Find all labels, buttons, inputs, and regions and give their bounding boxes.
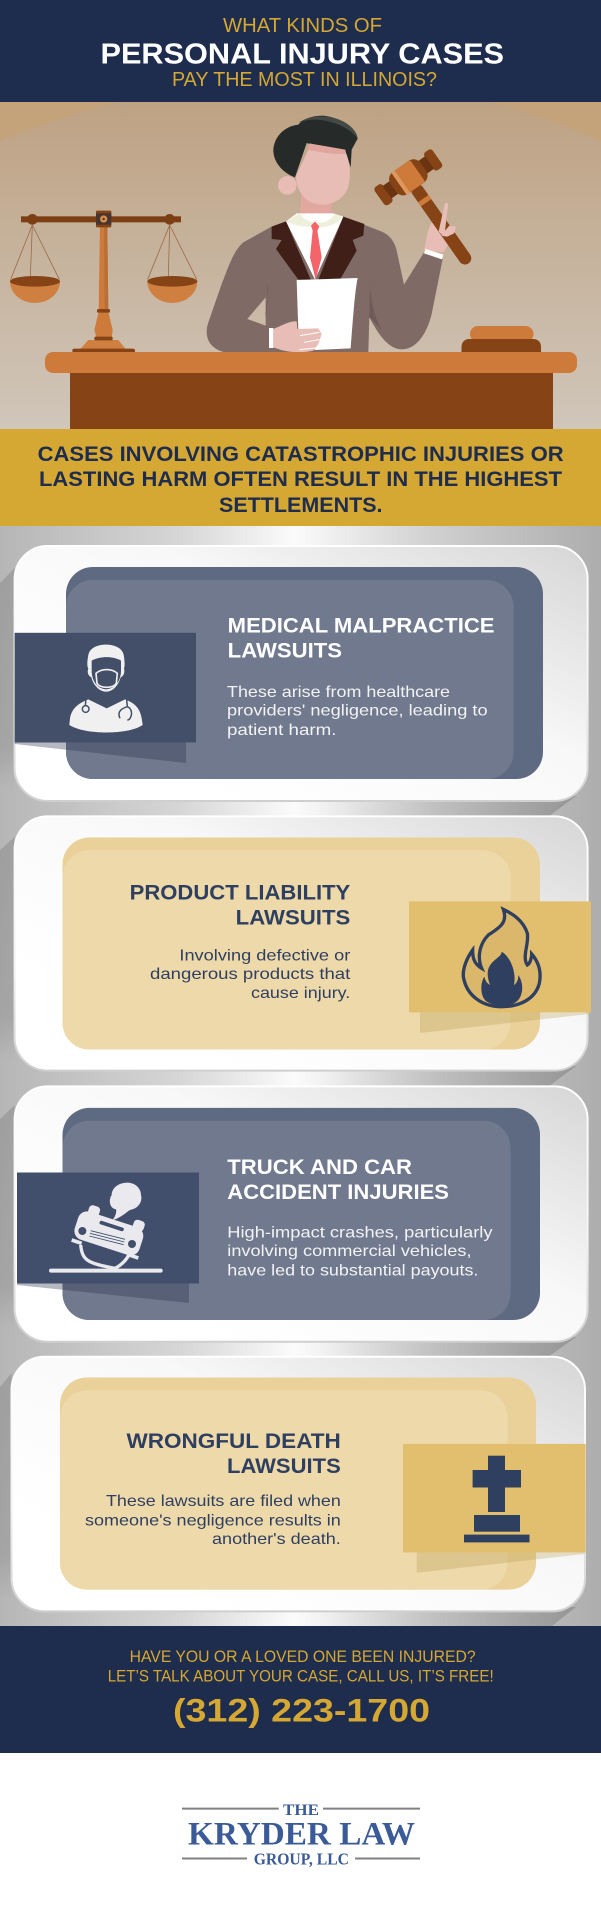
- heading: LAWSUITS: [228, 640, 342, 662]
- footer call to action: LET’S TALK ABOUT YOUR CASE, CALL US, IT’S FREE!: [108, 1667, 494, 1685]
- description: someone's negligence results in: [85, 1512, 341, 1529]
- gold summary banner: SETTLEMENTS.: [219, 494, 382, 517]
- logo: The Kryder Law Group, LLC: KRYDER LAW: [188, 1816, 415, 1852]
- desk: [45, 352, 577, 429]
- title line 1: WHAT KINDS OF: [223, 15, 382, 37]
- heading: ACCIDENT INJURIES: [227, 1181, 449, 1204]
- logo: The Kryder Law Group, LLC: [182, 1802, 420, 1868]
- heading: [130, 882, 350, 930]
- description: [85, 1493, 341, 1548]
- gold summary banner: CASES INVOLVING CATASTROPHIC INJURIES OR: [38, 443, 564, 466]
- logo: The Kryder Law Group, LLC: GROUP, LLC: [254, 1850, 349, 1868]
- document: [297, 278, 358, 350]
- description: [227, 1224, 493, 1279]
- description: providers' negligence, leading to: [227, 703, 488, 720]
- ribbon with grave icon: [403, 1444, 586, 1552]
- left hand: [273, 321, 322, 352]
- heading: PRODUCT LIABILITY: [130, 882, 350, 905]
- description: These lawsuits are filed when: [106, 1493, 341, 1510]
- description: High-impact crashes, particularly: [227, 1224, 493, 1242]
- judge neck: [300, 194, 332, 226]
- scales of justice: [10, 211, 197, 353]
- card: truck and car accidents: [0, 1086, 588, 1357]
- description: have led to substantial payouts.: [227, 1262, 478, 1279]
- heading: TRUCK AND CAR: [227, 1156, 412, 1179]
- gavel: [372, 146, 497, 284]
- card: wrongful death: [0, 1357, 586, 1626]
- right hand behind gavel: [424, 222, 455, 252]
- icon: gravestone cross: [464, 1456, 530, 1542]
- description: [227, 684, 488, 739]
- description: dangerous products that: [150, 966, 351, 983]
- metallic background: [0, 526, 601, 1626]
- pointing fingers: [439, 203, 456, 237]
- heading: [227, 1156, 449, 1204]
- description: cause injury.: [251, 985, 350, 1002]
- phone number: (312) 223-1700: [173, 1692, 430, 1728]
- heading: WRONGFUL DEATH: [126, 1430, 341, 1453]
- judge head: [273, 116, 358, 205]
- judge shirt and tie: [286, 213, 343, 280]
- title line 3: PAY THE MOST IN ILLINOIS?: [172, 69, 437, 91]
- heading: LAWSUITS: [236, 907, 350, 930]
- desk block: [462, 326, 541, 352]
- description: patient harm.: [227, 722, 336, 739]
- judge jacket: [207, 217, 443, 352]
- description: [150, 947, 351, 1002]
- icon: doctor in mask: [69, 645, 143, 732]
- heading: [228, 614, 494, 662]
- description: involving commercial vehicles,: [227, 1243, 472, 1260]
- courtroom illustration: [0, 102, 601, 429]
- header band: [0, 0, 601, 102]
- heading: [126, 1430, 341, 1478]
- ribbon with overturned car icon: [17, 1172, 199, 1284]
- footer call to action: HAVE YOU OR A LOVED ONE BEEN INJURED?: [130, 1648, 476, 1666]
- heading: LAWSUITS: [227, 1455, 341, 1478]
- title line 2: PERSONAL INJURY CASES: [100, 39, 504, 71]
- gold summary banner: LASTING HARM OFTEN RESULT IN THE HIGHEST: [39, 468, 562, 491]
- card: medical malpractice: [0, 546, 588, 817]
- description: These arise from healthcare: [227, 684, 450, 701]
- ribbon with doctor icon: [15, 633, 196, 742]
- logo: The Kryder Law Group, LLC: THE: [283, 1802, 319, 1819]
- description: Involving defective or: [179, 947, 351, 964]
- icon: overturned car: [49, 1183, 163, 1273]
- card: product liability: [0, 816, 591, 1087]
- judge figure: [207, 116, 497, 352]
- footer call to action: [0, 1626, 601, 1753]
- heading: MEDICAL MALPRACTICE: [228, 614, 494, 638]
- icon: flame: [463, 909, 540, 1007]
- ribbon with flame icon: [409, 901, 591, 1012]
- gold summary banner: [0, 429, 601, 526]
- description: another's death.: [212, 1531, 341, 1548]
